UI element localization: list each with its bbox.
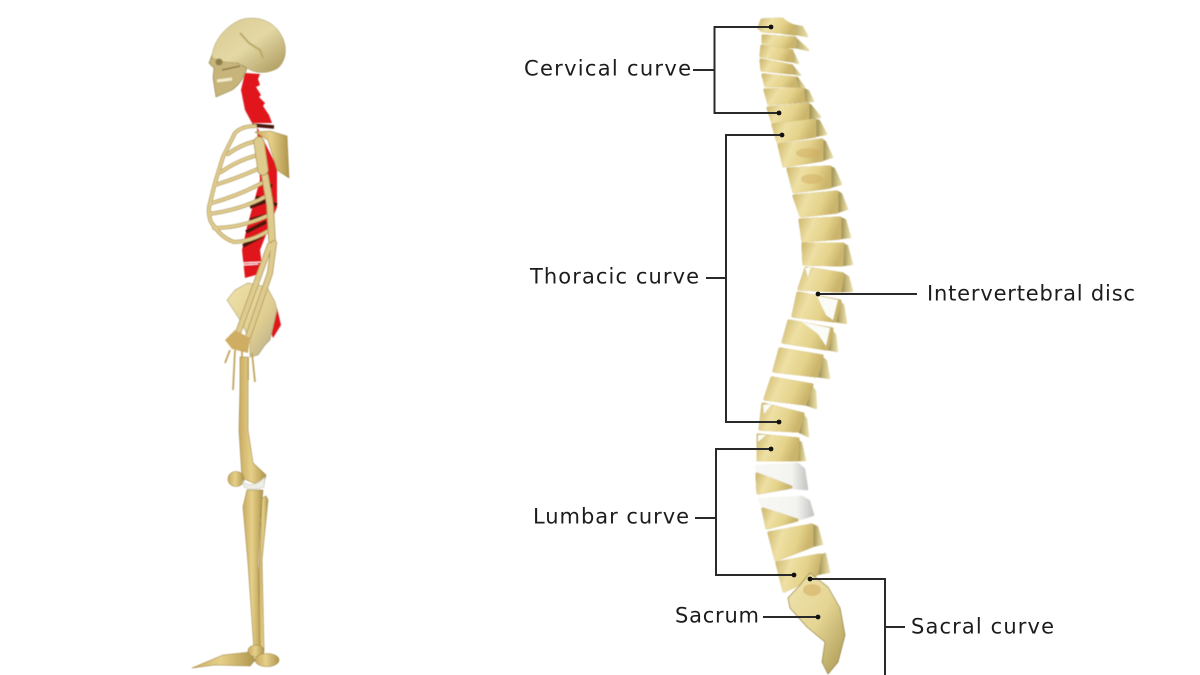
label: sacrum: Sacrum xyxy=(675,604,759,628)
teeth xyxy=(217,79,232,81)
bracket: thoracic curve xyxy=(706,133,784,424)
sacrum bone xyxy=(788,573,845,674)
scapula xyxy=(255,131,289,178)
bracket: lumbar curve xyxy=(695,447,796,577)
label: intervertebral disc: Intervertebral disc xyxy=(927,282,1135,306)
fibula xyxy=(259,496,268,652)
cervical vertebrae xyxy=(759,19,820,123)
red spine: thoracic and lumbar xyxy=(242,127,277,278)
cranial suture xyxy=(240,33,263,58)
foot xyxy=(192,645,279,668)
face and jaw xyxy=(209,55,247,97)
pelvis xyxy=(227,283,277,357)
forearm xyxy=(238,243,274,337)
white disc lines xyxy=(242,262,262,265)
arm bones xyxy=(225,142,274,390)
knee cartilage xyxy=(242,477,265,490)
label: lumbar curve: Lumbar curve xyxy=(533,504,689,528)
bracket: sacral curve xyxy=(808,577,905,675)
leader: sacrum xyxy=(763,615,820,619)
bracket: cervical curve xyxy=(693,25,781,115)
eye socket xyxy=(216,58,222,66)
red sacrum xyxy=(267,308,281,338)
panel: full skeleton side view xyxy=(192,18,289,668)
skull xyxy=(209,18,285,97)
leader: intervertebral disc xyxy=(816,292,917,296)
hand xyxy=(225,330,255,390)
tibia xyxy=(243,490,263,650)
cheekbone xyxy=(222,66,240,70)
dark gaps between ribs xyxy=(243,125,277,246)
femur xyxy=(239,357,266,487)
label: cervical curve: Cervical curve xyxy=(524,56,691,80)
patella xyxy=(228,472,244,486)
humerus xyxy=(259,142,272,240)
ribs outline xyxy=(209,126,268,242)
thoracic vertebrae xyxy=(760,120,852,436)
cranium xyxy=(212,18,285,73)
label: sacral curve: Sacral curve xyxy=(911,614,1054,638)
red spine: cervical xyxy=(241,73,272,123)
lumbar vertebrae xyxy=(756,435,829,591)
ochre surface marks xyxy=(796,148,823,184)
rib cage xyxy=(209,126,268,242)
ribs fill xyxy=(209,126,268,242)
panel: vertebral column xyxy=(756,19,852,674)
label: thoracic curve: Thoracic curve xyxy=(529,264,699,288)
